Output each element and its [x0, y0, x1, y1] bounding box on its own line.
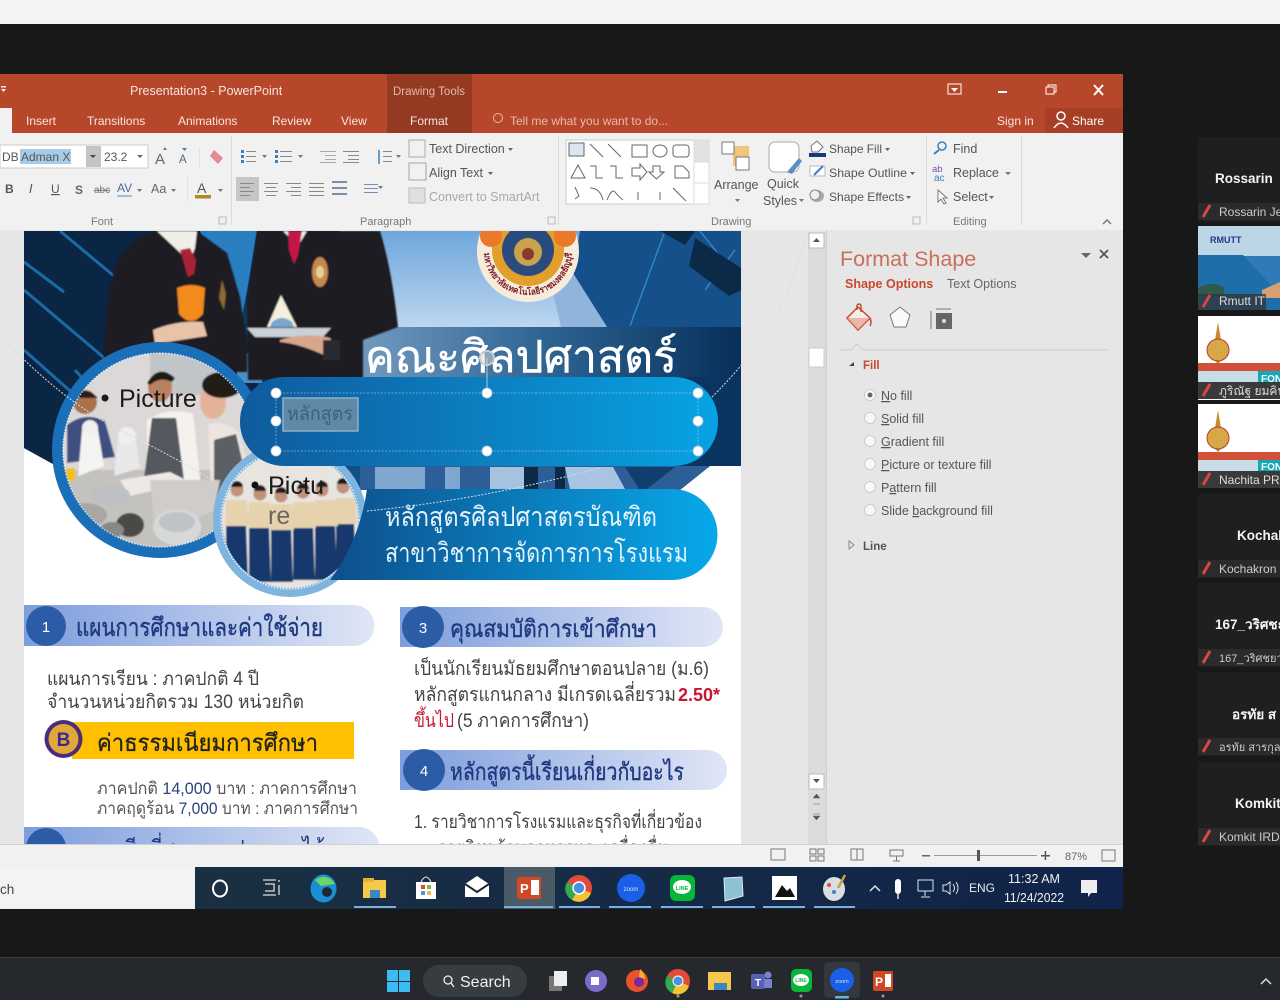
fill options: Solid fill	[881, 412, 924, 426]
icon: edge	[310, 874, 336, 902]
fill options: Picture or texture fill	[881, 458, 991, 472]
PowerPoint window	[0, 74, 1123, 909]
tile: Komkit: Komkit	[1235, 796, 1280, 811]
font group: AV	[117, 181, 132, 195]
status bar: 87%	[1065, 851, 1087, 863]
font group: U	[51, 182, 60, 196]
fill options: Gradient fill	[881, 435, 944, 449]
editing group	[932, 135, 1111, 228]
picture placeholder label	[252, 476, 322, 524]
tile: Komkit: Komkit IRD	[1219, 830, 1280, 844]
section 1 heading: แผนการศึกษาและค่าใช้จ่าย	[76, 613, 323, 642]
ribbon: Text Direction	[429, 142, 505, 156]
section 3 body: 2.50*	[678, 685, 720, 705]
icon: start	[387, 970, 410, 992]
font group: DB	[2, 150, 19, 164]
font group: A	[179, 154, 187, 166]
panel: Format Shape: Format Shape	[840, 247, 976, 271]
tile: Kochakron: Kochakron	[1219, 562, 1276, 576]
title bar: View	[341, 114, 367, 128]
section 4 body: 1. รายวิชาการโรงแรมและธุรกิจที่เกี่ยวข้อง	[414, 809, 702, 834]
editing canvas	[0, 230, 826, 844]
icon: firefox	[626, 969, 648, 992]
tile: Rmutt IT	[1198, 226, 1280, 310]
circular photo: kitchen	[52, 342, 268, 558]
shape fill, outline, effects: Shape Fill	[829, 142, 882, 156]
editing group: Find	[953, 142, 977, 156]
program pill: สาขาวิชาการจัดการการโรงแรม	[385, 538, 688, 568]
tile: 167	[1198, 618, 1280, 666]
section 4 heading: 4	[420, 763, 428, 780]
title bar: Drawing Tools	[393, 86, 465, 98]
title bar: Transitions	[87, 114, 145, 128]
picture placeholder label: Pictu	[268, 472, 324, 500]
arrange and styles: Quick	[767, 177, 800, 191]
Windows taskbar inside shared screen: 11/24/2022	[1004, 891, 1064, 905]
font group: B	[5, 182, 14, 196]
section 3 body: หลักสูตรแกนกลาง มีเกรดเฉลี่ยรวม	[414, 681, 676, 707]
tile: Orathai: อรทัย ส	[1232, 707, 1277, 722]
font group: A	[155, 151, 165, 168]
ribbon	[0, 133, 1123, 230]
editing group: Editing	[953, 216, 987, 228]
fill options: Fill	[863, 360, 880, 372]
university logo	[477, 231, 579, 302]
title bar: Format	[410, 114, 449, 128]
status bar	[0, 844, 1123, 867]
search box: ch	[0, 882, 14, 897]
strip of buildings	[360, 466, 710, 490]
program name text: หลักสูตรศิลปศาสตรบัณฑิต	[385, 502, 657, 533]
icon: notes	[724, 877, 743, 901]
title bar: Review	[272, 114, 312, 128]
section 3 body: เป็นนักเรียนมัธยมศึกษาตอนปลาย (ม.6)	[414, 656, 709, 680]
section 4 heading: หลักสูตรนี้เรียนเกี่ยวกับอะไร	[450, 754, 684, 787]
picture placeholder label: Picture	[119, 385, 197, 413]
dotted rotated outline	[0, 235, 805, 511]
tile: Nachita PR: Nachita PR	[1219, 473, 1280, 487]
ribbon: Paragraph	[360, 216, 411, 228]
tile: Kochakron	[1198, 530, 1280, 577]
font group: A	[197, 180, 207, 196]
title bar: Sign in	[997, 114, 1034, 128]
icon: photos	[772, 876, 797, 900]
circular photo: students	[213, 443, 367, 597]
university logo: มหาวิทยาลัยเทคโนโลยีราชมงคลธัญบุรี	[484, 252, 574, 296]
section 2 heading (cut off)	[24, 827, 380, 844]
section 4 heading	[400, 749, 727, 791]
icon: line: LINE	[795, 978, 807, 984]
Windows taskbar inside shared screen: ENG	[969, 881, 995, 895]
staff in suits photo	[104, 231, 398, 380]
search box	[0, 867, 195, 909]
icon: layout	[931, 309, 952, 329]
title bar: Animations	[178, 114, 237, 128]
scrollbar	[808, 233, 826, 844]
ribbon: Drawing	[711, 216, 751, 228]
icon: line: LINE	[676, 886, 689, 892]
section 2 heading (cut off): อาชีพที่สามารถประกอบได้	[100, 832, 325, 864]
section 1 body: แผนการเรียน : ภาคปกติ 4 ปี	[47, 668, 259, 690]
section 4 body	[415, 808, 701, 844]
arrange and styles	[714, 142, 804, 208]
panel: Format Shape: Shape Options	[845, 277, 933, 291]
Windows taskbar inside shared screen: 11:32 AM	[1008, 871, 1060, 886]
section 1 body: จำนวนหน่วยกิตรวม 130 หน่วยกิต	[47, 692, 304, 713]
font group: Aa	[151, 182, 166, 196]
icon: zoom active: zoom	[835, 979, 849, 985]
tuition fee bar: ค่าธรรมเนียมการศึกษา	[97, 730, 318, 757]
section 1 body	[48, 668, 303, 708]
system tray	[870, 879, 958, 899]
icon: zoom	[617, 874, 645, 902]
fill options: No fill	[881, 389, 912, 403]
icon: line	[791, 969, 812, 992]
icon: store	[416, 877, 436, 899]
top light strip	[0, 0, 1280, 24]
selected text box with handles: หลักสูตร	[287, 404, 353, 425]
panel: Format Shape	[826, 230, 1123, 844]
icon: chrome	[665, 969, 690, 994]
program pill	[330, 489, 718, 580]
icon: zoom active	[824, 962, 860, 998]
icon: powerpoint: P	[875, 975, 883, 989]
title bar: Share	[1072, 114, 1104, 128]
selected text box with handles	[271, 351, 703, 456]
icon: powerpoint	[517, 877, 541, 899]
icon: task view	[549, 971, 567, 991]
icon: mail	[465, 876, 489, 897]
shape fill, outline, effects: Shape Effects	[829, 190, 904, 204]
panel: Format Shape: Text Options	[947, 277, 1016, 291]
font group: abc	[94, 185, 110, 196]
font group: S	[75, 183, 83, 197]
tile: thai name slide 1	[1198, 316, 1280, 400]
icon: paint	[823, 875, 845, 901]
picture placeholder label: re	[268, 502, 290, 530]
header photo background	[24, 231, 741, 491]
icon: folder	[708, 972, 731, 990]
section 3 heading: 3	[419, 620, 427, 637]
editing group: ac	[934, 173, 945, 184]
search pill	[423, 965, 527, 997]
font group: Font	[91, 216, 113, 228]
tile: Rmutt IT: Rmutt IT	[1219, 294, 1266, 308]
arrange and styles: Arrange	[714, 178, 759, 192]
ribbon: Align Text	[429, 166, 483, 180]
shape fill, outline, effects	[809, 141, 915, 204]
icon: powerpoint: P	[520, 881, 529, 896]
section 3 heading	[400, 606, 723, 648]
title bar: Tell me what you want to do...	[510, 114, 668, 128]
icon: powerpoint	[873, 971, 893, 991]
icon: teams: T	[755, 978, 761, 989]
section 4 body: รายวิชาด้านอาหารและเครื่องดื่ม	[438, 835, 668, 858]
slide	[24, 231, 741, 844]
tile: Rmutt IT: RMUTT	[1210, 235, 1242, 245]
editing group: ab	[932, 164, 943, 175]
font group: 23.2	[104, 150, 128, 164]
tuition fee amounts: ภาคฤดูร้อน 7,000 บาท : ภาคการศึกษา	[97, 799, 358, 819]
band behind title	[362, 327, 741, 377]
shape fill, outline, effects: Shape Outline	[829, 166, 907, 180]
icon: meet chat	[585, 970, 607, 992]
tile: Orathai: อรทัย สารกุล	[1219, 742, 1280, 754]
fill options: Slide background fill	[881, 504, 993, 518]
fill options	[849, 360, 993, 553]
tile: Nachita PR	[1198, 404, 1280, 488]
fill options: Line	[863, 541, 887, 553]
section 3 heading: คุณสมบัติการเข้าศึกษา	[450, 616, 657, 644]
section 3 body: ขึ้นไป	[414, 706, 454, 732]
arrange and styles: Styles	[763, 194, 797, 208]
icon: folder	[363, 878, 386, 898]
search pill: Search	[460, 974, 511, 991]
icon: pentagon	[890, 307, 910, 327]
Zoom participants column	[1198, 137, 1280, 846]
section 1 heading	[24, 605, 374, 646]
icon: chrome	[565, 875, 592, 902]
tile: Rossarin	[1198, 173, 1280, 220]
font group: Adman X	[21, 150, 70, 164]
tuition fee amounts: ภาคปกติ 14,000 บาท : ภาคการศึกษา	[97, 779, 357, 798]
fill options: Pattern fill	[881, 481, 937, 495]
tuition fee bar	[44, 720, 354, 759]
title bar	[0, 74, 1123, 133]
ribbon: Convert to SmartArt	[429, 190, 540, 204]
shape gallery	[566, 140, 709, 204]
editing group: Replace	[953, 166, 999, 180]
icon: teams	[751, 972, 772, 989]
icon: line	[670, 875, 695, 901]
section 3 body	[414, 656, 720, 732]
tile: Komkit	[1198, 798, 1280, 845]
title: คณะศิลปศาสตร์	[365, 333, 677, 382]
tuition fee amounts	[97, 779, 358, 819]
Windows 11 taskbar	[0, 957, 1280, 1000]
paragraph group	[236, 140, 426, 203]
title bar: Presentation3 - PowerPoint	[130, 84, 283, 98]
section 3 body: (5 ภาคการศึกษา)	[457, 710, 589, 732]
editing group: Select	[953, 190, 988, 204]
tuition fee bar: B	[57, 730, 70, 751]
icon: zoom: zoom	[624, 887, 638, 893]
font group	[0, 135, 232, 228]
picture placeholder label	[102, 389, 196, 407]
Windows taskbar inside shared screen	[0, 867, 1123, 909]
section 1 heading: 1	[42, 619, 50, 636]
tile: Orathai	[1198, 708, 1280, 755]
font group: I	[29, 182, 33, 196]
title bar: Insert	[26, 114, 57, 128]
icon: fill bucket	[847, 304, 871, 330]
blue pill placeholder	[240, 377, 718, 466]
tile: Rossarin: Rossarin	[1215, 171, 1273, 186]
